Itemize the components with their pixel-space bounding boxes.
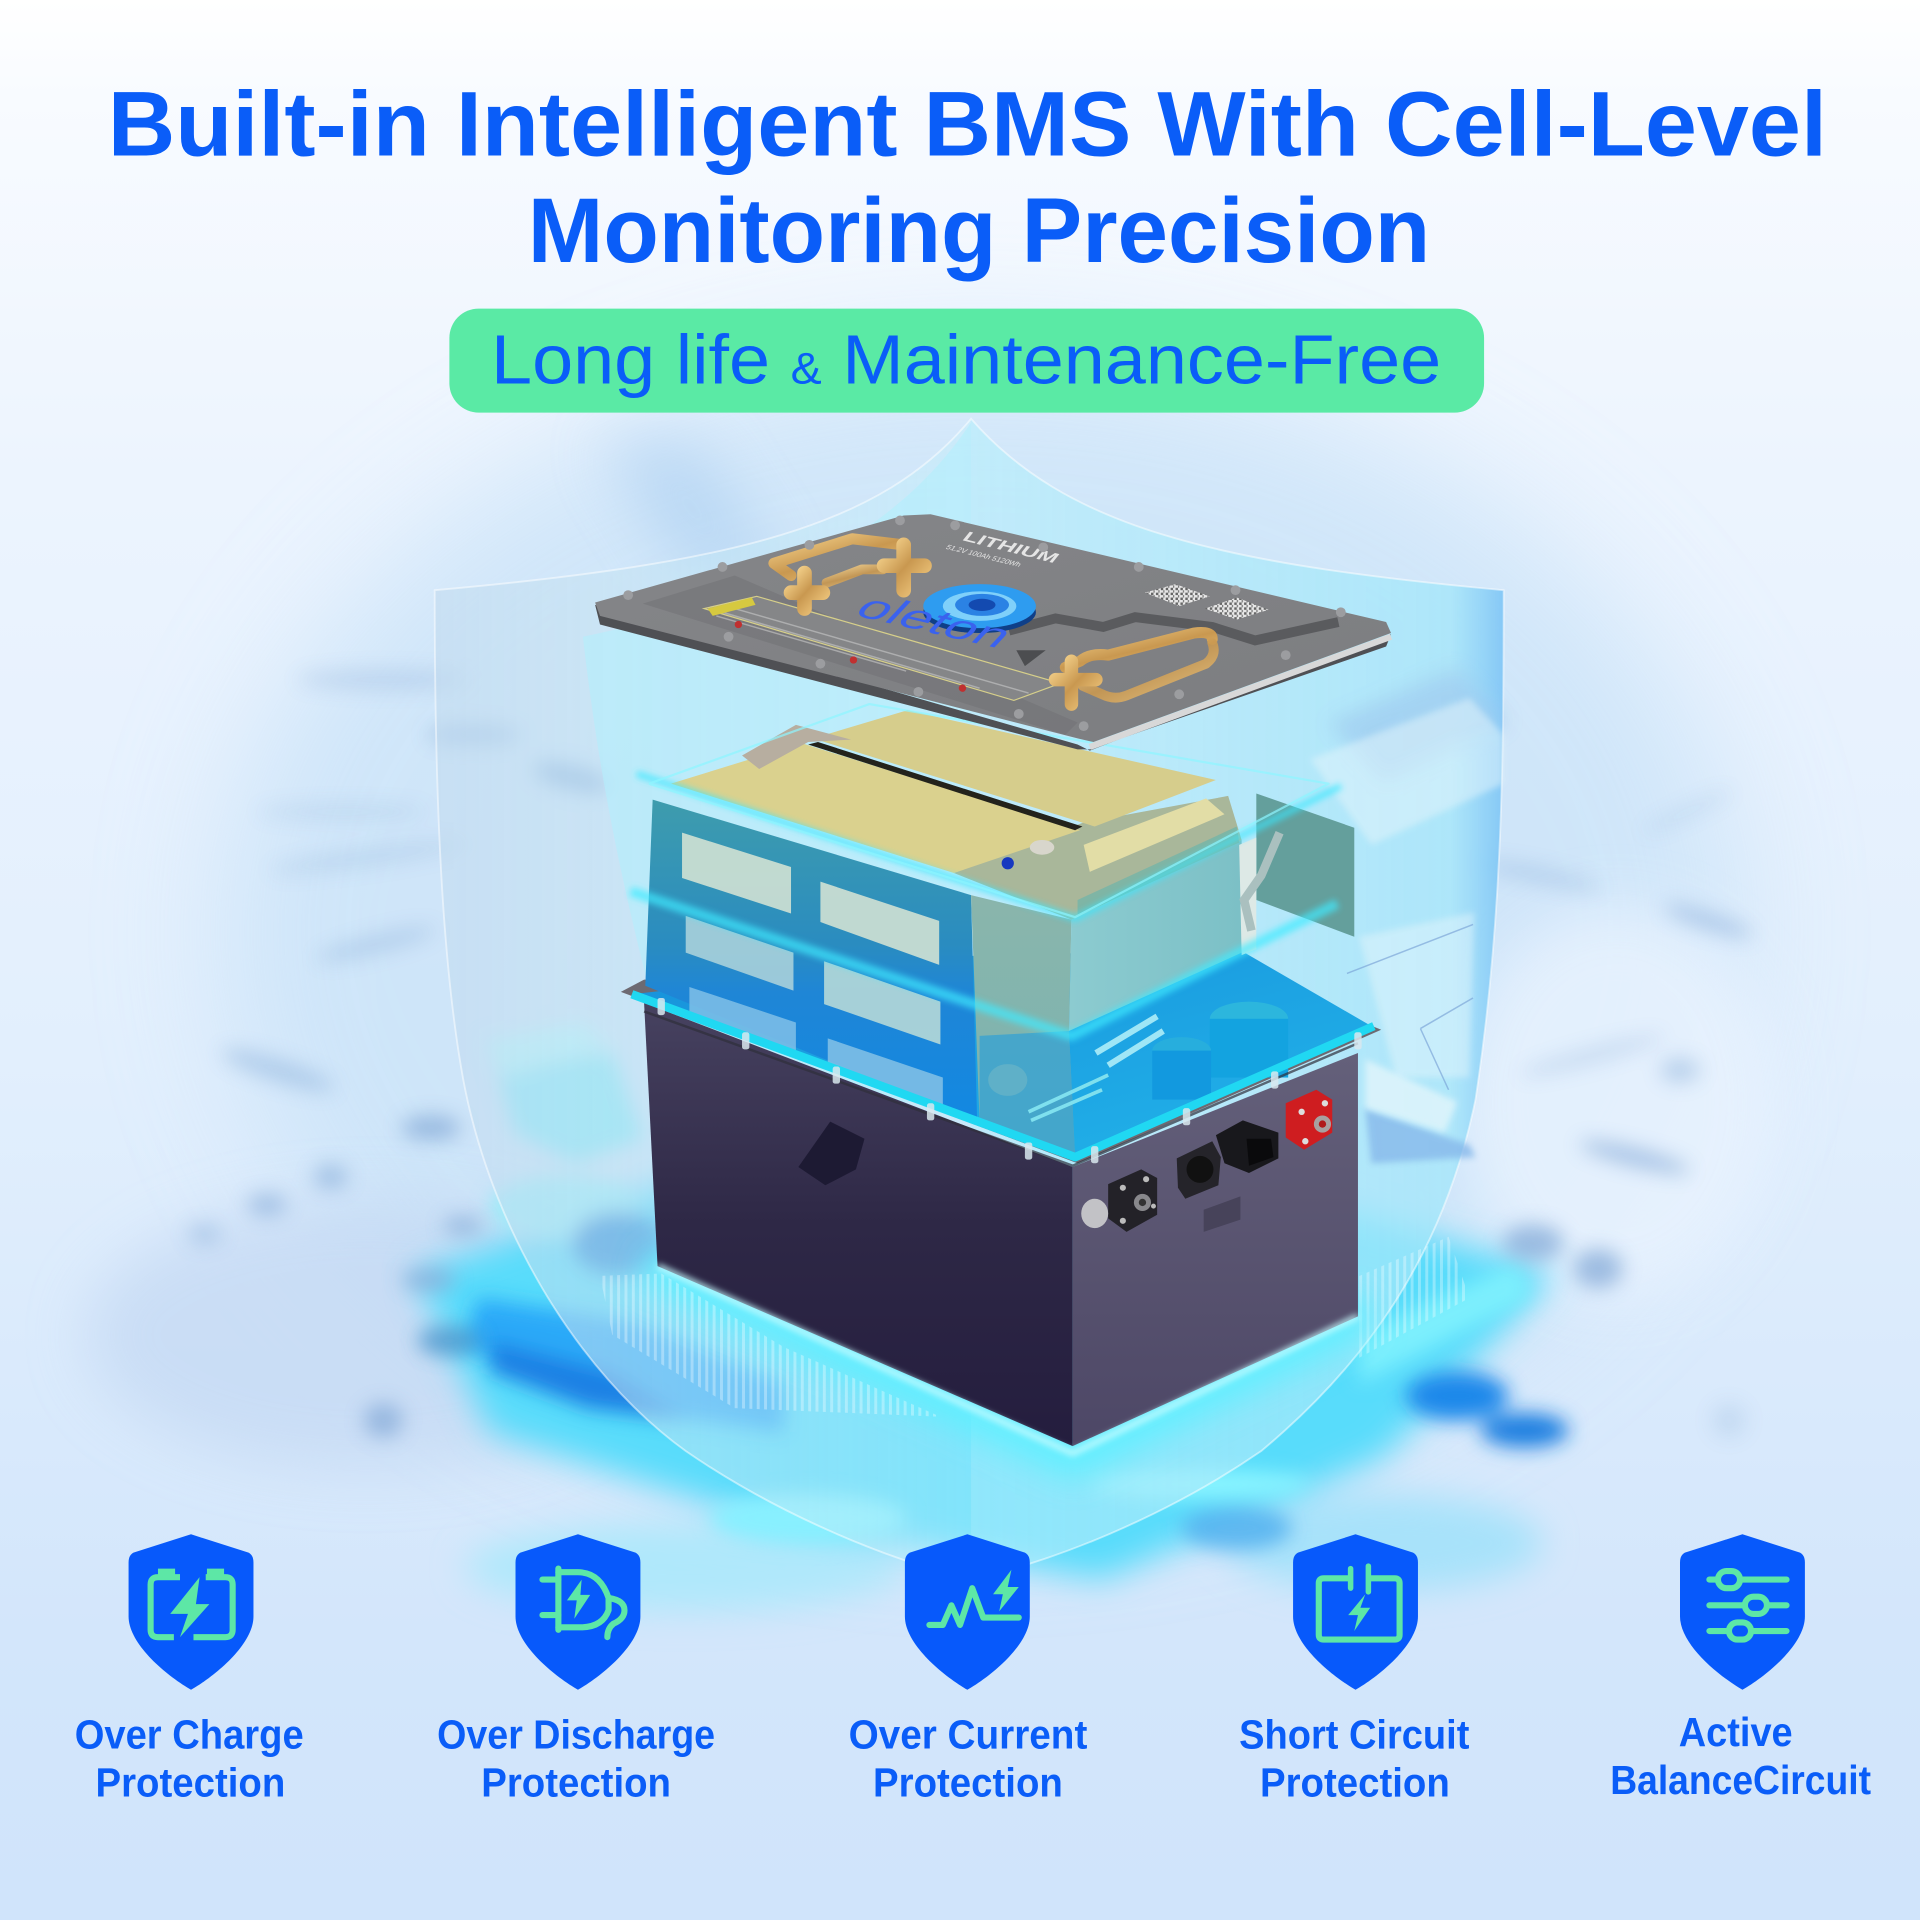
glowing layer lines xyxy=(631,704,1374,1166)
feature: over charge protection xyxy=(75,1534,304,1758)
lid: blue button xyxy=(923,584,1036,633)
feature: active balance circuit xyxy=(1679,1534,1805,1755)
case: right face xyxy=(1073,1053,1358,1446)
cell right face xyxy=(1069,840,1242,1031)
glow under battery xyxy=(600,1264,1365,1457)
label line 2: Protection xyxy=(1260,1759,1450,1805)
feature: over current protection xyxy=(849,1534,1087,1758)
label: Over Current xyxy=(849,1712,1087,1758)
case bottom light edge xyxy=(658,1266,1358,1453)
subtitle pill xyxy=(449,309,1484,413)
case handle xyxy=(798,1122,864,1185)
title: Monitoring Precision xyxy=(528,180,1430,282)
label: Over Discharge xyxy=(437,1712,715,1758)
BMS components in blue xyxy=(988,1002,1288,1120)
label line 2: Protection xyxy=(96,1759,285,1805)
lid: product label: LITHIUM xyxy=(959,528,1063,566)
cell side plate xyxy=(971,895,1075,1157)
small terminal and dot xyxy=(1002,840,1054,869)
connector: square plug xyxy=(1216,1120,1278,1173)
rim pegs xyxy=(658,998,1362,1163)
title: Built-in Intelligent BMS With Cell-Level xyxy=(108,74,1827,176)
lid: product label xyxy=(944,528,1063,568)
lid: warning label xyxy=(704,596,1060,700)
lid: QR codes xyxy=(1145,584,1269,620)
base interior, blue glass xyxy=(632,950,1371,1156)
label: Over Charge xyxy=(75,1712,304,1758)
case label plate xyxy=(1204,1196,1240,1232)
cell block left face xyxy=(645,800,977,1122)
label: Short Circuit xyxy=(1239,1712,1469,1758)
terminal: positive red xyxy=(1286,1090,1332,1150)
lid: gold handles xyxy=(774,539,1214,704)
icon: shield with open battery xyxy=(1293,1534,1418,1690)
lid: top surface xyxy=(595,514,1391,742)
cell windows xyxy=(682,833,943,1104)
lid: product label: 51.2V 100Ah 5120Wh xyxy=(944,543,1023,568)
icon: shield with plug xyxy=(516,1534,640,1690)
case: left face xyxy=(644,1003,1073,1446)
icon: shield with battery xyxy=(129,1534,253,1690)
terminal: negative xyxy=(1081,1169,1157,1232)
yellow insulation board front xyxy=(671,743,1080,873)
battery illustration xyxy=(595,514,1391,1457)
copper busbar xyxy=(742,725,851,769)
large translucent shield xyxy=(435,419,1504,1580)
label line 2: Protection xyxy=(481,1759,671,1805)
icon: shield with pulse xyxy=(905,1534,1030,1690)
icon: shield with sliders xyxy=(1680,1534,1805,1690)
rear bracket plate xyxy=(1256,793,1354,937)
wireframe board inside shield xyxy=(1310,667,1506,1359)
blurred circuit board backdrop xyxy=(187,670,1755,1611)
title xyxy=(108,74,1827,282)
feature: over discharge protection xyxy=(437,1534,715,1758)
yellow insulation board rear xyxy=(813,710,1216,827)
label line 2: Protection xyxy=(873,1759,1063,1805)
connector: round socket xyxy=(1177,1141,1221,1199)
subtitle pill: Long life & Maintenance-Free xyxy=(491,320,1441,398)
label line 2: BalanceCircuit xyxy=(1610,1757,1871,1803)
lid: pegs xyxy=(623,516,1346,731)
lid: underside edge xyxy=(595,605,1391,751)
feature: short circuit protection xyxy=(1239,1534,1469,1758)
lid: logo: oleton xyxy=(846,587,1023,655)
PCB area atop cells xyxy=(954,796,1242,920)
label: Active xyxy=(1679,1709,1793,1755)
lid: recessed panel and channel xyxy=(643,576,1338,735)
bracket hardware xyxy=(1244,833,1280,931)
lid: bright side edge xyxy=(1090,637,1391,747)
base rim xyxy=(621,980,1381,1163)
